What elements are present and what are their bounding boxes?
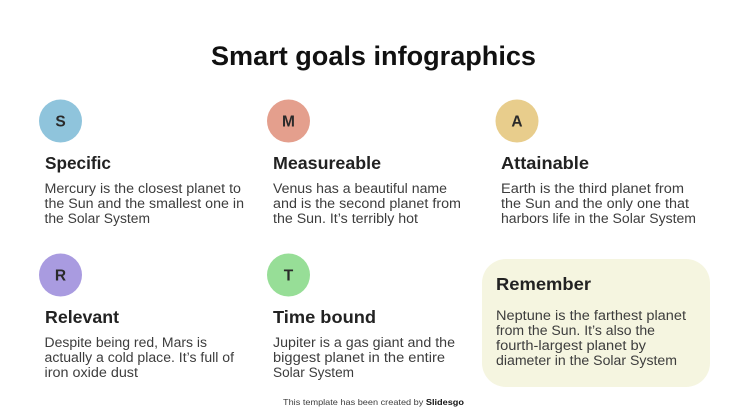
- icon: M badge: [267, 100, 310, 142]
- text: measureable: and is the second planet from: [273, 196, 461, 211]
- text: relevant: iron oxide dust: [44, 365, 138, 380]
- text: specific: the Solar System: [44, 211, 150, 226]
- text: remember: fourth-largest planet by: [496, 338, 646, 353]
- text: remember: diameter in the Solar System: [496, 353, 677, 368]
- heading: remember: Remember: [496, 274, 591, 294]
- text: attainable: the Sun and the only one that: [501, 196, 689, 211]
- panel background: [482, 259, 710, 387]
- text: relevant: Despite being red, Mars is: [44, 335, 207, 350]
- panel: relevant: [39, 254, 234, 380]
- text: measureable: Venus has a beautiful name: [273, 181, 447, 196]
- text: time bound: Jupiter is a gas giant and the: [273, 335, 455, 350]
- panel: attainable: [496, 100, 696, 226]
- icon: R badge: R: [55, 268, 66, 284]
- text: attainable: harbors life in the Solar System: [501, 211, 696, 226]
- text: measureable: [273, 181, 461, 226]
- text: measureable: the Sun. It’s terribly hot: [273, 211, 418, 226]
- icon: R badge: [39, 254, 82, 296]
- heading: attainable: Attainable: [501, 153, 589, 173]
- heading: specific: Specific: [45, 153, 111, 173]
- text: relevant: [44, 335, 234, 380]
- icon: M badge: M: [282, 114, 295, 130]
- icon: S badge: S: [55, 114, 66, 130]
- heading: measureable: Measureable: [273, 153, 381, 173]
- panel: time bound: [267, 254, 455, 380]
- text: remember: Neptune is the farthest planet: [496, 308, 686, 323]
- title: Smart goals infographics: [211, 41, 536, 71]
- text: time bound: Solar System: [273, 365, 354, 380]
- text: attainable: [501, 181, 696, 226]
- text: time bound: [273, 335, 455, 380]
- footer credit: This template has been created by Slidesgo: [283, 397, 464, 407]
- heading: time bound: Time bound: [273, 307, 376, 327]
- panel: remember: [482, 259, 710, 387]
- text: specific: [44, 181, 244, 226]
- heading: relevant: Relevant: [45, 307, 119, 327]
- text: remember: from the Sun. It’s also the: [496, 323, 655, 338]
- text: attainable: Earth is the third planet from: [501, 181, 684, 196]
- icon: T badge: T: [284, 268, 294, 284]
- text: relevant: actually a cold place. It’s full of: [44, 350, 234, 365]
- icon: A badge: [496, 100, 538, 142]
- text: time bound: biggest planet in the entire: [273, 350, 445, 365]
- panel: measureable: [267, 100, 461, 226]
- text: remember: [496, 308, 686, 368]
- panel: specific: [39, 100, 244, 226]
- icon: S badge: [39, 100, 82, 142]
- icon: A badge: A: [511, 114, 523, 130]
- icon: T badge: [267, 254, 310, 296]
- text: specific: the Sun and the smallest one in: [44, 196, 244, 211]
- text: specific: Mercury is the closest planet to: [44, 181, 241, 196]
